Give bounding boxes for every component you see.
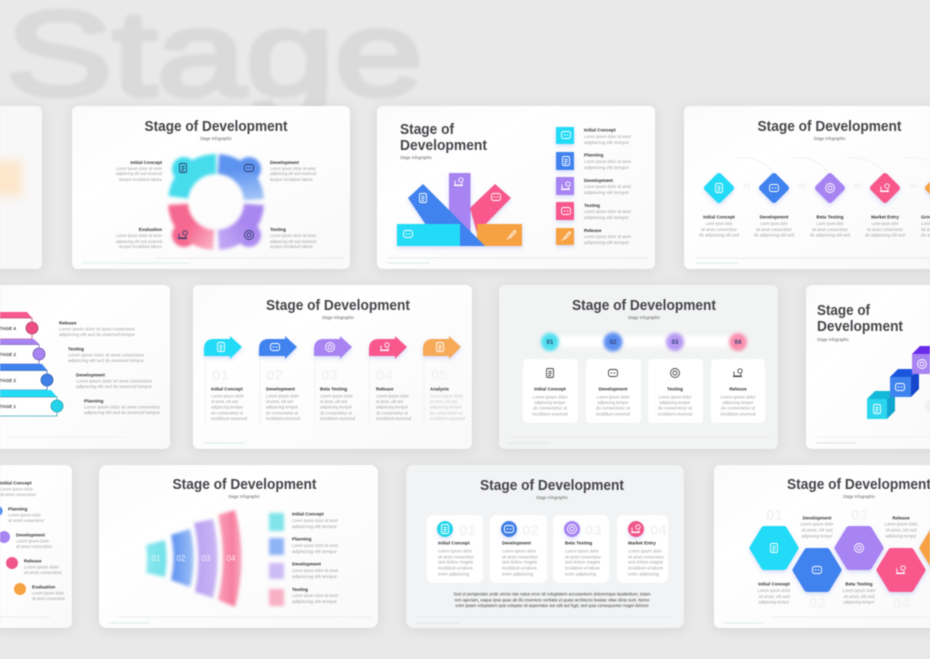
subtitle: Stage Infographic	[400, 155, 433, 160]
card text: Lorem ipsum dolor	[720, 394, 756, 400]
pyramid descriptions: Development	[76, 372, 105, 378]
faint numbers: 03	[851, 507, 868, 524]
faint numbers: 02	[809, 595, 826, 612]
card text: adipiscing tempor	[598, 400, 629, 405]
step text columns: Lorem ipsum dolor	[376, 394, 409, 398]
step text columns: adipiscing tempor	[430, 404, 462, 410]
diamond labels: sit amet consectetur	[756, 227, 792, 232]
funnel numbers	[152, 554, 236, 563]
connector arcs	[737, 158, 930, 172]
subtitle: Stage Infographic	[817, 337, 850, 342]
card text: incididunt ut labore	[438, 566, 473, 570]
diamond labels: do adipiscing elit sed	[865, 232, 905, 238]
funnel numbers: 02	[177, 554, 186, 563]
panel: diamond timeline	[684, 106, 930, 269]
title: Stage of Development	[144, 119, 288, 135]
card text: Initial Concept	[438, 540, 470, 546]
step text columns: Analysis	[430, 386, 449, 392]
step text columns: sit amet, elit sed	[266, 399, 293, 404]
step text columns: Release	[376, 386, 394, 392]
card text: Lorem ipsum dolor	[596, 394, 630, 400]
ring labels: Testing	[270, 227, 286, 232]
step text columns: Lorem ipsum dolor	[430, 394, 463, 398]
bottom paragraph: Sed ut perspiciatis unde omnis iste natus error sit voluptatem accusantium doloremque laudantium, totam	[454, 592, 651, 596]
diamond labels: Beta Testing	[816, 214, 844, 220]
card text: incididunt eiusmod	[532, 412, 568, 416]
list labels: adipiscing elit tempor	[584, 215, 630, 220]
step text columns: adipiscing tempor	[320, 404, 352, 410]
card text: Lorem ipsum dolor	[565, 548, 599, 554]
step text columns: sit amet, elit sed	[376, 399, 403, 404]
step numbers: 04	[910, 184, 917, 190]
hexagon labels: Lorem ipsum dolor	[884, 522, 918, 526]
hexagon labels: sit amet, elit sed	[758, 594, 790, 599]
step text columns: do consectetur ut	[320, 410, 353, 416]
subtitle: Stage Infographic	[843, 494, 876, 499]
card text: incididunt ut labore	[565, 566, 600, 570]
list labels: adipiscing elit tempor	[584, 165, 630, 170]
list labels: adipiscing elit tempor	[584, 240, 630, 245]
legend text: Lorem ipsum dolor sit amet	[292, 568, 339, 573]
card text: sed dolore magna	[502, 560, 537, 564]
ring labels: adipiscing elit sed eiusmod	[116, 171, 162, 176]
hexagon labels: Development	[803, 516, 832, 520]
list labels	[584, 128, 632, 245]
hexagons	[752, 529, 930, 589]
list text: Lorem ipsum dolor	[8, 512, 41, 518]
panel: partial card top left	[0, 106, 42, 269]
faint numbers	[766, 507, 910, 612]
step numbers	[212, 367, 448, 384]
subtitle: Stage Infographic	[536, 495, 569, 500]
legend text: adipiscing elit tempor	[292, 549, 338, 554]
title: Stage of	[400, 122, 454, 138]
card text: do consectetur ut	[658, 406, 693, 410]
diamond labels: do adipiscing elit sed	[810, 232, 850, 238]
pyramid descriptions: adipiscing elit sed do eiusmod tempor	[59, 332, 136, 337]
diamond icons	[716, 184, 889, 192]
blurred orange shape	[0, 160, 22, 196]
list labels: adipiscing elit tempor	[584, 190, 630, 195]
hexagon labels: Initial Concept	[758, 582, 790, 586]
legend text: adipiscing elit tempor	[292, 574, 338, 579]
step text columns: sit amet, elit sed	[430, 399, 457, 404]
panel: stage pyramid	[0, 285, 170, 449]
diamond labels: Lorem ipsum dolor	[760, 221, 788, 226]
legend text: adipiscing elit tempor	[292, 524, 338, 529]
list labels: Lorem ipsum dolor sit amet	[584, 184, 632, 189]
ring labels: adipiscing elit sed eiusmod	[270, 171, 316, 176]
step text columns: Beta Testing	[320, 386, 347, 392]
diamond labels: Lorem ipsum dolor	[872, 221, 899, 226]
subtitle: Stage Infographic	[628, 315, 661, 320]
list labels: Development	[584, 178, 613, 183]
step text columns: Lorem ipsum dolor	[211, 394, 244, 398]
step text columns: do consectetur ut	[376, 410, 409, 416]
legend text: Development	[292, 562, 321, 566]
diamond labels: do adipiscing elit sed	[754, 232, 794, 238]
title	[817, 303, 903, 335]
card text: sit amet consectetur	[565, 554, 601, 560]
card text: Initial Concept	[534, 386, 566, 392]
step text columns: Initial Concept	[211, 386, 243, 392]
card text: enim adipiscing	[628, 572, 659, 576]
list text: Lorem ipsum dolor	[16, 538, 49, 544]
faint numbers: 01	[766, 507, 783, 524]
timeline numbers: 01	[547, 340, 554, 346]
panel: arrow steps	[193, 285, 472, 449]
ring labels: Lorem ipsum dolor sit amet	[116, 166, 163, 171]
card text: incididunt eiusmod	[596, 412, 630, 416]
diamond labels: do adipiscing elit sed	[699, 232, 739, 238]
list text: sit amet consectetur	[32, 596, 65, 601]
ring labels: adipiscing elit sed eiusmod	[116, 239, 162, 244]
ring labels: tempor incididunt labore	[270, 177, 313, 182]
step numbers: 03	[854, 184, 861, 190]
hexagon labels: Lorem ipsum dolor	[800, 522, 834, 526]
diamond labels: Lorem ipsum dolor	[706, 221, 733, 226]
step numbers: 02	[799, 184, 806, 190]
diamond labels: Initial Concept	[703, 214, 735, 220]
pyramid stage labels	[0, 326, 16, 409]
ring labels: Lorem ipsum dolor sit amet	[116, 233, 163, 238]
step numbers: 04	[376, 367, 393, 384]
circle badges	[437, 521, 644, 537]
ring labels: Lorem ipsum dolor sit amet	[270, 166, 317, 171]
faint numbers: 04	[893, 595, 910, 612]
step text columns: do consectetur ut	[430, 410, 463, 416]
card text	[532, 386, 756, 416]
step numbers: 01	[744, 184, 751, 190]
hexagon labels: Lorem ipsum dolor	[758, 588, 791, 593]
card text: do consectetur ut	[596, 406, 631, 410]
ring icons	[178, 164, 254, 240]
faint circle	[924, 400, 930, 412]
list text: sit amet consectetur	[0, 492, 36, 497]
list text	[0, 480, 65, 601]
diamond labels: Lorem ipsum dolor	[816, 221, 844, 226]
card text: Development	[599, 386, 628, 392]
list text: Development	[16, 532, 45, 538]
card text	[438, 540, 664, 576]
cube: blue	[890, 369, 919, 397]
diamond labels	[699, 214, 930, 238]
card text: incididunt eiusmod	[658, 412, 692, 416]
faint numbers	[459, 522, 667, 539]
step text columns: do consectetur ut	[211, 410, 244, 416]
timeline numbers: 03	[672, 340, 679, 346]
bottom paragraph: enim ipsam voluptatem quia voluptas sit aspernatur aut odit aut fugit, sed quia consequuntur magni dolores	[456, 603, 649, 608]
subtitle: Stage Infographic	[228, 494, 261, 499]
list text: sit amet consectetur	[24, 570, 62, 575]
list labels: Lorem ipsum dolor sit amet	[584, 159, 632, 164]
pyramid descriptions: Lorem ipsum dolor sit amet consectetur	[76, 378, 152, 384]
title: Stage of Development	[266, 298, 410, 314]
title: Stage of Development	[172, 477, 317, 493]
legend tiles	[269, 513, 284, 606]
ring labels	[116, 160, 317, 249]
step numbers	[744, 184, 917, 190]
timeline numbers	[547, 340, 742, 346]
card text: Lorem ipsum dolor	[438, 548, 472, 554]
hexagon labels: sit amet, elit sed	[802, 528, 833, 532]
list labels: Release	[584, 228, 602, 233]
pyramid descriptions: Lorem ipsum dolor sit amet consectetur	[68, 352, 144, 358]
subtitle: Stage Infographic	[322, 315, 355, 320]
white cards	[523, 359, 765, 423]
card text: sit amet consectetur	[628, 554, 664, 560]
hexagon labels: Lorem ipsum dolor	[842, 588, 876, 593]
card text: enim adipiscing	[438, 572, 469, 576]
card text: sed dolore magna	[565, 560, 600, 564]
panel: partial list card	[0, 465, 72, 628]
list labels: Initial Concept	[584, 128, 616, 132]
step numbers: 02	[266, 367, 283, 384]
hexagon labels: sit amet, elit sed	[886, 528, 917, 532]
list labels: adipiscing elit tempor	[584, 140, 630, 145]
step text columns	[211, 386, 465, 421]
step text columns: adipiscing tempor	[376, 404, 408, 410]
card text: Lorem ipsum dolor	[628, 548, 662, 554]
step text columns: incididunt eiusmod	[430, 416, 465, 421]
list icons	[561, 132, 570, 240]
step text columns: Lorem ipsum dolor	[266, 394, 299, 398]
step text columns: adipiscing tempor	[211, 404, 243, 410]
legend text	[292, 512, 339, 604]
legend text: Lorem ipsum dolor sit amet	[292, 543, 339, 548]
panel: hexagon chain	[714, 465, 930, 628]
title: Stage of	[817, 303, 870, 319]
pyramid descriptions: adipiscing elit sed do eiusmod tempor	[84, 410, 161, 415]
ring labels: tempor incididunt labore	[119, 177, 162, 182]
faint numbers: 01	[459, 522, 476, 539]
panel: ring diagram	[72, 106, 350, 269]
ring labels: Development	[270, 160, 299, 165]
step text columns: do consectetur ut	[266, 410, 299, 416]
step text columns: incididunt eiusmod	[376, 416, 411, 421]
list text: Evaluation	[32, 584, 55, 590]
card text: Beta Testing	[565, 540, 592, 546]
list text: Lorem ipsum dolor	[0, 486, 33, 492]
title: Development	[817, 319, 903, 335]
pyramid descriptions: Lorem ipsum dolor sit amet consectetur	[59, 326, 135, 332]
step text columns: sit amet, elit sed	[211, 399, 238, 404]
card text: incididunt ut labore	[628, 566, 663, 570]
step text columns: Development	[266, 386, 295, 392]
title: Stage of Development	[480, 478, 624, 494]
diamond labels: Market Entry	[871, 214, 899, 220]
list text: Lorem ipsum dolor	[24, 564, 59, 570]
card text: Testing	[667, 386, 683, 392]
list text: Planning	[8, 506, 28, 512]
pyramid descriptions	[59, 320, 161, 415]
ring labels: Lorem ipsum dolor sit amet	[270, 233, 317, 238]
step text columns: incididunt eiusmod	[320, 416, 355, 421]
card text: Lorem ipsum dolor	[532, 394, 568, 400]
list labels: Lorem ipsum dolor sit amet	[584, 209, 632, 214]
legend text: Planning	[292, 536, 312, 542]
faint numbers: 02	[522, 522, 539, 539]
legend text: Lorem ipsum dolor sit amet	[292, 518, 339, 523]
pyramid descriptions: Release	[59, 320, 77, 326]
faint numbers: 04	[650, 522, 667, 539]
card text: sit amet consectetur	[438, 554, 474, 560]
hexagon labels: Release	[892, 516, 910, 520]
step text columns: sit amet, elit sed	[320, 399, 347, 404]
legend text: Initial Concept	[292, 512, 324, 516]
timeline blobs	[541, 332, 747, 352]
card text: Lorem ipsum dolor	[658, 394, 692, 400]
step text columns: incididunt eiusmod	[211, 416, 247, 421]
hexagon icons	[770, 544, 905, 574]
panel: funnel chart	[99, 465, 378, 628]
list text: sit amet consectetur	[8, 518, 44, 523]
ring chart	[172, 157, 261, 247]
list text: Lorem ipsum dolor	[32, 590, 64, 596]
card text: enim adipiscing	[502, 572, 533, 576]
ring labels: tempor incididunt labore	[119, 244, 162, 249]
diamond labels: sit amet consectetur	[812, 227, 848, 232]
arrows	[204, 336, 461, 359]
hexagon labels: adipiscing tempor	[844, 600, 875, 604]
diamond labels: sit amet consectetur	[701, 227, 737, 232]
card text: sit amet consectetur	[502, 554, 538, 560]
fan icons	[404, 178, 516, 240]
step numbers: 01	[212, 367, 229, 384]
card text: adipiscing tempor	[534, 400, 566, 405]
card text: sed dolore magna	[438, 560, 473, 564]
bottom paragraph: rem aperiam, eaque ipsa quae ab illo inventore veritatis et quasi architecto beatae vitae dicta sunt. Nemo	[454, 598, 650, 602]
ring labels: Initial Concept	[130, 160, 162, 165]
card text: incididunt ut labore	[502, 566, 537, 570]
bottom paragraph	[454, 592, 651, 608]
card text: incididunt eiusmod	[720, 412, 756, 416]
card icons	[546, 368, 742, 378]
hexagon labels	[758, 516, 918, 604]
list text: Initial Concept	[0, 480, 32, 486]
ring labels: Evaluation	[139, 227, 162, 232]
step numbers: 05	[431, 367, 448, 384]
column rules	[205, 356, 424, 425]
ring labels: adipiscing elit sed eiusmod	[270, 239, 316, 244]
pyramid descriptions: Lorem ipsum dolor sit amet consectetur	[84, 404, 160, 410]
legend text: adipiscing elit tempor	[292, 599, 338, 604]
list labels: Lorem ipsum dolor sit amet	[584, 234, 632, 239]
card text: adipiscing tempor	[660, 400, 691, 405]
funnel numbers: 03	[202, 554, 211, 563]
diamond labels: Development	[760, 214, 789, 220]
card text: Release	[729, 386, 747, 392]
list text: sit amet consectetur	[16, 544, 52, 549]
hexagon labels: adipiscing tempor	[758, 600, 790, 604]
hexagon labels: adipiscing tempor	[886, 534, 917, 538]
legend text: Testing	[292, 587, 308, 592]
pyramid descriptions: adipiscing elit sed do eiusmod tempor	[68, 358, 145, 363]
step text columns: incididunt eiusmod	[266, 416, 300, 421]
subtitle: Stage Infographic	[200, 136, 233, 141]
diamond labels: sit amet consectetur	[867, 227, 903, 232]
list labels: Planning	[584, 152, 604, 158]
pyramid descriptions: adipiscing elit sed do eiusmod tempor	[76, 384, 153, 389]
timeline band	[550, 336, 738, 347]
card text: Lorem ipsum dolor	[502, 548, 536, 554]
badge icons	[442, 524, 640, 534]
step text columns: adipiscing tempor	[266, 404, 298, 410]
cube: purple	[912, 346, 930, 374]
cube: cyan	[867, 391, 895, 419]
title: Stage of Development	[572, 298, 716, 314]
funnel segments	[146, 510, 242, 607]
list tiles	[556, 127, 574, 245]
card text: do consectetur ut	[721, 406, 756, 410]
panel: cube steps	[806, 285, 930, 449]
step numbers: 03	[321, 367, 338, 384]
list text: Release	[24, 558, 42, 564]
card text: do consectetur ut	[533, 406, 568, 410]
list labels: Lorem ipsum dolor sit amet	[584, 134, 632, 139]
funnel numbers: 04	[227, 554, 236, 563]
panel: numbered cards	[499, 285, 778, 449]
funnel numbers: 01	[152, 554, 161, 563]
list labels: Testing	[584, 203, 600, 208]
ring labels: tempor incididunt labore	[270, 244, 313, 249]
timeline numbers: 04	[735, 340, 742, 346]
card text: adipiscing tempor	[722, 400, 754, 405]
pyramid descriptions: Testing	[68, 346, 84, 352]
diamonds	[707, 176, 930, 200]
hexagon labels: sit amet, elit sed	[844, 594, 875, 599]
card text: sed dolore magna	[628, 560, 663, 564]
title	[400, 122, 487, 154]
title: Stage of Development	[758, 119, 902, 135]
list badges	[0, 506, 26, 595]
panel: icon cards with paragraph	[406, 465, 684, 628]
card text: Development	[502, 540, 531, 546]
panel: fan diagram	[377, 106, 655, 269]
title: Development	[400, 138, 487, 154]
faint numbers: 03	[585, 522, 602, 539]
legend text: Lorem ipsum dolor sit amet	[292, 593, 339, 598]
timeline numbers: 02	[610, 340, 617, 346]
card text: Market Entry	[628, 540, 656, 546]
hexagon labels: Beta Testing	[845, 582, 873, 586]
subtitle: Stage Infographic	[814, 136, 846, 141]
pyramid descriptions: Planning	[84, 398, 104, 404]
hexagon labels: adipiscing tempor	[802, 534, 833, 538]
arrow icons	[218, 342, 444, 352]
card text: enim adipiscing	[565, 572, 596, 576]
pyramid number badges	[26, 322, 63, 412]
step text columns: Lorem ipsum dolor	[320, 394, 353, 398]
fan chart	[397, 173, 522, 246]
white cards	[427, 515, 668, 583]
pyramid layers	[0, 312, 57, 416]
